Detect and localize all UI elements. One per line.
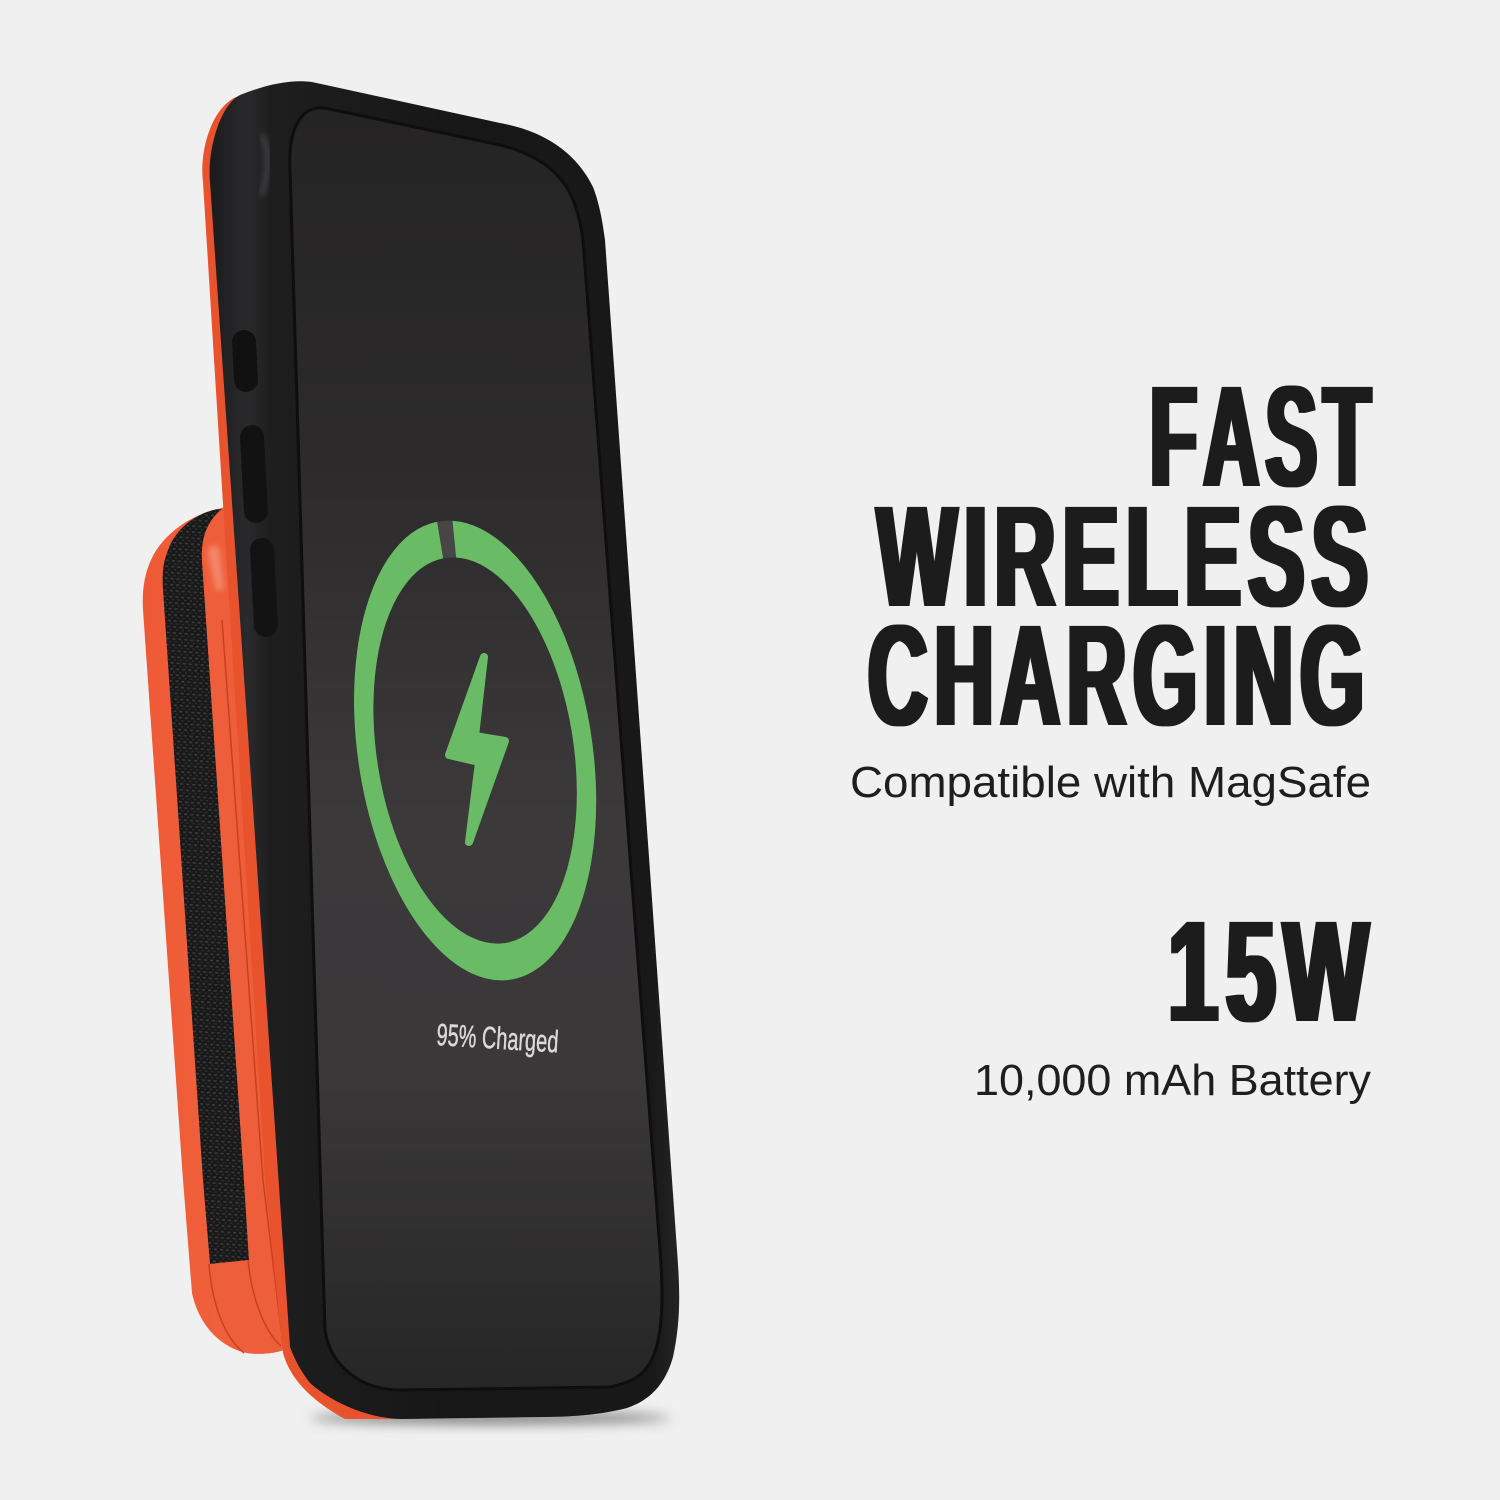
stat caption: battery: 10,000 mAh Battery <box>974 1056 1371 1105</box>
product: phone in case <box>202 81 679 1419</box>
ring gap <box>440 537 455 542</box>
phone screen <box>290 108 662 1390</box>
side button upper <box>231 329 259 393</box>
floor shadow <box>310 1412 670 1424</box>
side button middle <box>239 424 269 524</box>
webbing strap <box>163 509 249 1264</box>
case orange edge <box>202 90 420 1419</box>
stand highlight <box>208 546 224 590</box>
charging ring <box>350 521 600 980</box>
subheading: compatibility: Compatible with MagSafe <box>850 758 1371 807</box>
charge status text: 95% Charged <box>436 1017 559 1059</box>
stand orange body <box>143 500 300 1354</box>
side button lower <box>249 537 279 638</box>
stat: wattage: 15W <box>1168 891 1376 1052</box>
product: wallet battery stand behind phone <box>143 500 300 1354</box>
stand crease lines <box>209 620 283 1353</box>
ring progress arc <box>350 521 600 980</box>
case black bumper <box>210 81 679 1419</box>
bumper corner highlight <box>262 135 267 195</box>
icon: lightning bolt <box>449 657 505 842</box>
stand side panel <box>202 500 300 1354</box>
heading: fast wireless charging <box>868 356 1377 756</box>
